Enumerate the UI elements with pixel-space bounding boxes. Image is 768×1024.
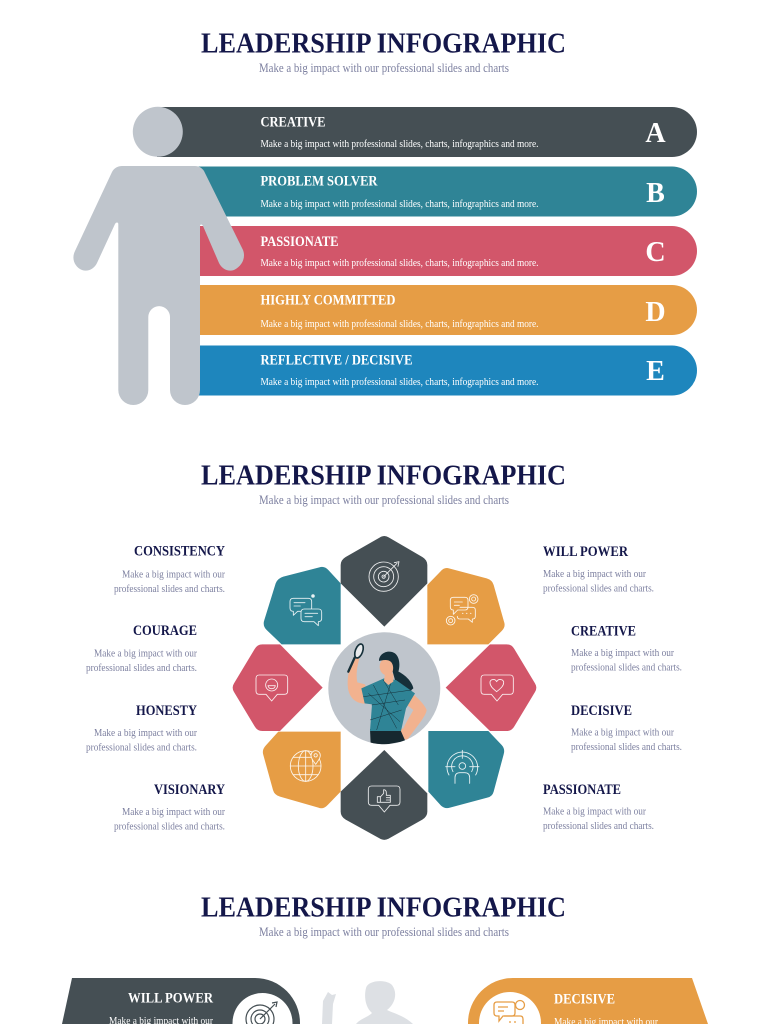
card: will power (62, 978, 300, 1024)
label: creative: professional slides and charts. (571, 662, 682, 674)
label: passionate (543, 782, 654, 832)
label: visionary: professional slides and charts. (114, 820, 225, 832)
bar E: reflective / decisive: E (646, 356, 665, 387)
ponytail (394, 672, 414, 690)
bar E: reflective / decisive: REFLECTIVE / DECISIVE (260, 352, 412, 368)
magnifying glass (348, 658, 355, 672)
bar E: reflective / decisive (190, 346, 697, 396)
petal: upper right orange chat (427, 568, 505, 644)
raised arm (348, 658, 367, 704)
section 1: person with five bars (73, 28, 697, 405)
center portrait: woman with magnifying glass (328, 632, 440, 744)
label: passionate: professional slides and charts. (543, 820, 654, 832)
card: decisive (468, 978, 708, 1024)
petal: left pink smile (233, 644, 323, 731)
label: honesty: professional slides and charts. (86, 742, 197, 754)
arm, right (401, 695, 427, 740)
bar A: creative: A (645, 118, 666, 149)
icon: chat badge (479, 992, 541, 1024)
label: decisive: DECISIVE (571, 703, 632, 719)
label: visionary (114, 782, 225, 832)
bar C: passionate: Make a big impact with professional slides, charts, infographics and more. (260, 258, 538, 269)
title: section 1: LEADERSHIP INFOGRAPHIC (201, 28, 566, 60)
shirt (361, 678, 415, 731)
bar D: highly committed (190, 285, 697, 335)
label: will power: professional slides and charts. (543, 582, 654, 594)
label: visionary: VISIONARY (154, 782, 225, 798)
petal: top target (341, 536, 427, 627)
petal: bottom thumbs up (341, 750, 427, 840)
label: will power: WILL POWER (543, 544, 628, 560)
bar C: passionate: C (645, 237, 666, 268)
bar D: highly committed: HIGHLY COMMITTED (260, 292, 396, 308)
icon: target badge (232, 993, 292, 1024)
subtitle: section 1: Make a big impact with our professional slides and charts (259, 60, 509, 75)
label: honesty (86, 703, 197, 754)
bar E: reflective / decisive: Make a big impact with professional slides, charts, infographics and more. (260, 377, 538, 388)
card: will power: WILL POWER (128, 990, 213, 1006)
section 2: radial diagram (86, 460, 682, 840)
bar C: passionate (190, 226, 697, 276)
label: consistency: CONSISTENCY (134, 544, 225, 560)
label: passionate: Make a big impact with our (543, 806, 646, 818)
label: visionary: Make a big impact with our (122, 806, 225, 818)
card: decisive: DECISIVE (554, 992, 615, 1008)
bar B: problem solver: Make a big impact with professional slides, charts, infographics and more. (260, 199, 538, 210)
bar B: problem solver (157, 166, 697, 216)
bar D: highly committed: D (645, 297, 666, 328)
petal: right pink heart (446, 644, 536, 731)
label: creative (571, 624, 682, 674)
center circle (328, 632, 440, 744)
label: will power (543, 544, 654, 594)
bar C: passionate: PASSIONATE (260, 234, 338, 250)
label: decisive (571, 703, 682, 753)
label: honesty: HONESTY (136, 703, 197, 719)
trousers (370, 729, 405, 744)
radial petals with icons (233, 536, 536, 840)
hair (379, 652, 399, 680)
icon: faded grey person (322, 981, 413, 1024)
petal: lower right teal target person (428, 731, 504, 808)
label: courage: professional slides and charts. (86, 662, 197, 674)
subtitle: section 3: Make a big impact with our professional slides and charts (259, 924, 509, 939)
title: section 3: LEADERSHIP INFOGRAPHIC (201, 892, 566, 924)
head and neck (384, 673, 393, 685)
subtitle: section 2: Make a big impact with our professional slides and charts (259, 492, 509, 507)
label: creative: CREATIVE (571, 624, 636, 640)
section 3: partial bottom panel (62, 892, 708, 1024)
petal: upper left teal chat (264, 567, 341, 644)
bar A: creative (157, 107, 697, 157)
label: passionate: PASSIONATE (543, 782, 621, 798)
label: courage (86, 623, 197, 674)
label: creative: Make a big impact with our (571, 647, 674, 659)
bar B: problem solver: B (646, 178, 665, 209)
bar A: creative: CREATIVE (260, 115, 326, 131)
bar B: problem solver: PROBLEM SOLVER (260, 174, 378, 190)
icon: grey person figure (73, 107, 244, 405)
title: section 2: LEADERSHIP INFOGRAPHIC (201, 460, 566, 492)
label: will power: Make a big impact with our (543, 568, 646, 580)
label: courage: Make a big impact with our (94, 648, 197, 660)
label: consistency (114, 544, 225, 595)
bar D: highly committed: Make a big impact with professional slides, charts, infographics and more. (260, 319, 538, 330)
label: consistency: professional slides and charts. (114, 583, 225, 595)
label: honesty: Make a big impact with our (94, 727, 197, 739)
bar A: creative: Make a big impact with professional slides, charts, infographics and more. (260, 139, 538, 150)
label: decisive: Make a big impact with our (571, 726, 674, 738)
petal: lower left orange globe (263, 732, 341, 808)
label: courage: COURAGE (133, 623, 197, 639)
label: decisive: professional slides and charts. (571, 741, 682, 753)
label: consistency: Make a big impact with our (122, 568, 225, 580)
